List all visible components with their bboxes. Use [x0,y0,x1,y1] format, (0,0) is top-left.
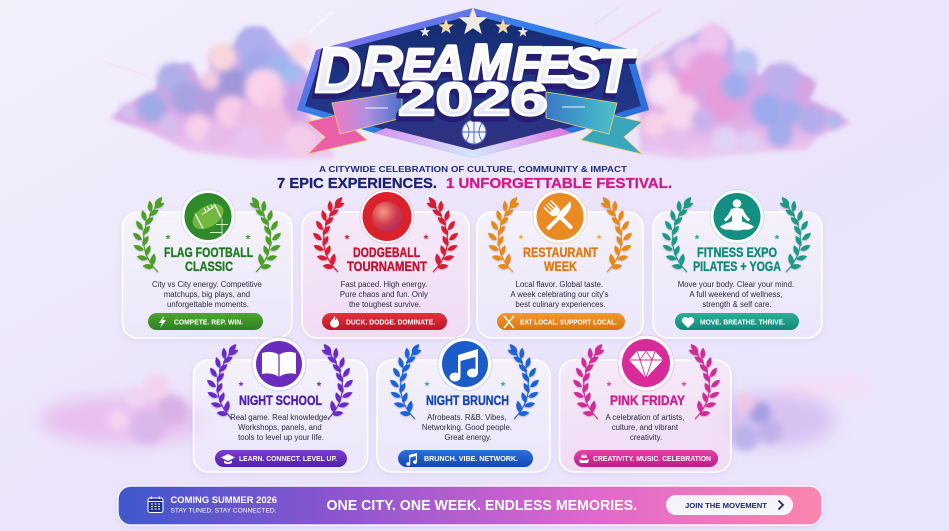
description: creativity. [630,433,662,442]
heading: WEEK [544,259,577,274]
pill: EAT LOCAL. SUPPORT LOCAL. [520,317,617,326]
icon: chevron [778,500,783,510]
title: DREAMFEST: D [315,34,361,106]
ribbon left [307,92,402,154]
pill [322,313,447,330]
icon: football [181,190,235,244]
icon: flame [330,316,339,328]
pill [398,450,533,467]
button: JOIN THE MOVEMENT [685,501,768,510]
button [666,495,793,515]
laurels [311,195,460,272]
icon: calendar [148,496,163,512]
icon: bolt [159,316,166,328]
icon: graduation cap [221,454,235,464]
description: strength & self care. [702,300,772,309]
panel: flag football [122,190,292,338]
laurels [486,195,634,272]
heading: PILATES + YOGA [693,259,781,274]
description: tools to level up your life. [238,433,324,442]
panel: night school [194,337,368,472]
stay tuned: STAY TUNED. STAY CONNECTED. [170,508,277,514]
panel: pink friday [560,335,731,472]
title: DREAMFEST: S [564,36,601,99]
description: the toughest survive. [349,300,421,309]
icon: note [406,453,417,466]
title: DREAMFEST: T [596,38,637,105]
description: Networking. Good people. [422,423,512,432]
laurels [571,342,722,419]
laurels [205,342,355,419]
pill [497,313,625,330]
icon: book [252,337,306,391]
clouds: lower left [40,374,210,445]
description: A full weekend of wellness, [689,290,783,299]
icon: fork and knife [533,190,587,244]
stars [606,381,687,386]
stars [238,381,322,386]
title: DREAMFEST: F [513,37,543,89]
pill [148,313,263,330]
description: Workshops, panels, and [238,423,322,432]
title: DREAMFEST: M [469,34,512,90]
icon: heart [682,317,694,328]
stars [694,234,780,239]
basketball [462,120,486,144]
panel: restaurant week [477,190,643,338]
pill [215,450,347,467]
pill [574,450,718,467]
icon: dodgeball [360,190,414,244]
icon: music note [438,337,492,391]
coming summer: COMING SUMMER 2026 [170,495,277,505]
description: A week celebrating our city's [510,290,609,299]
laurels [388,342,541,419]
pill: DUCK. DODGE. DOMINATE. [346,317,435,326]
stars [344,234,429,239]
description: best culinary experiences. [515,300,606,309]
description: culture, and vibrant [612,423,679,432]
description: Local flavor. Global taste. [516,280,603,289]
description: unforgettable moments. [167,300,249,309]
title: DREAMFEST: E [403,40,434,89]
pill: MOVE. BREATHE. THRIVE. [700,317,785,326]
laurels [131,195,283,272]
title: DREAMFEST: R [362,34,403,97]
icon: crossed utensils [504,316,514,328]
description: matchups, big plays, and [164,290,250,299]
shield frame [297,8,649,158]
panel: dodgeball [302,190,469,338]
laurels [660,195,813,272]
stars [424,381,506,386]
heading: NIGHT SCHOOL [239,393,322,408]
title: DREAMFEST: A [429,37,465,90]
light beams [105,8,664,76]
stars [165,234,251,239]
icon: lotus [579,453,589,463]
icon: meditation [710,190,764,244]
description: Afrobeats. R&B. Vibes, [427,413,507,422]
pill: COMPETE. REP. WIN. [174,317,243,326]
description: Fast paced. High energy. [341,280,427,289]
heading: FITNESS EXPO [697,245,777,260]
description: City vs City energy. Competitive [152,280,262,289]
headline: 1 UNFORGETTABLE FESTIVAL. [446,175,672,192]
stars [518,234,602,239]
bottom banner [118,486,822,525]
heading: CLASSIC [185,259,233,274]
title: 2026: 2026 [398,73,548,125]
clouds: top right [640,24,850,160]
title: DREAMFEST: E [537,37,572,93]
title badge [297,7,649,158]
heading: FLAG FOOTBALL [164,245,253,260]
panel: night brunch [377,337,550,472]
description: A celebration of artists, [605,413,684,422]
heading: PINK FRIDAY [610,393,685,408]
slogan: ONE CITY. ONE WEEK. ENDLESS MEMORIES. [326,498,637,514]
headline: 7 EPIC EXPERIENCES. [277,175,437,192]
description: Move your body. Clear your mind. [678,280,794,289]
description: Real game. Real knowledge. [230,413,330,422]
clouds: top left [110,27,335,160]
heading: RESTAURANT [523,245,599,260]
description: Pure chaos and fun. Only [340,290,428,299]
pill: BRUNCH. VIBE. NETWORK. [424,454,518,463]
clouds: lower right [715,380,875,451]
heading: DODGEBALL [353,245,420,260]
panel: fitness expo [653,190,822,338]
tagline: A CITYWIDE CELEBRATION OF CULTURE, COMMUNITY & IMPACT [319,164,628,174]
description: Great energy. [444,433,492,442]
stars [420,7,528,36]
icon: diamond [618,335,674,391]
heading: TOURNAMENT [347,259,428,274]
pill: LEARN. CONNECT. LEVEL UP. [239,454,337,463]
pill: CREATIVITY. MUSIC. CELEBRATION [593,454,711,463]
pill [675,313,799,330]
heading: NIGHT BRUNCH [426,393,509,408]
ribbon right [546,92,642,154]
